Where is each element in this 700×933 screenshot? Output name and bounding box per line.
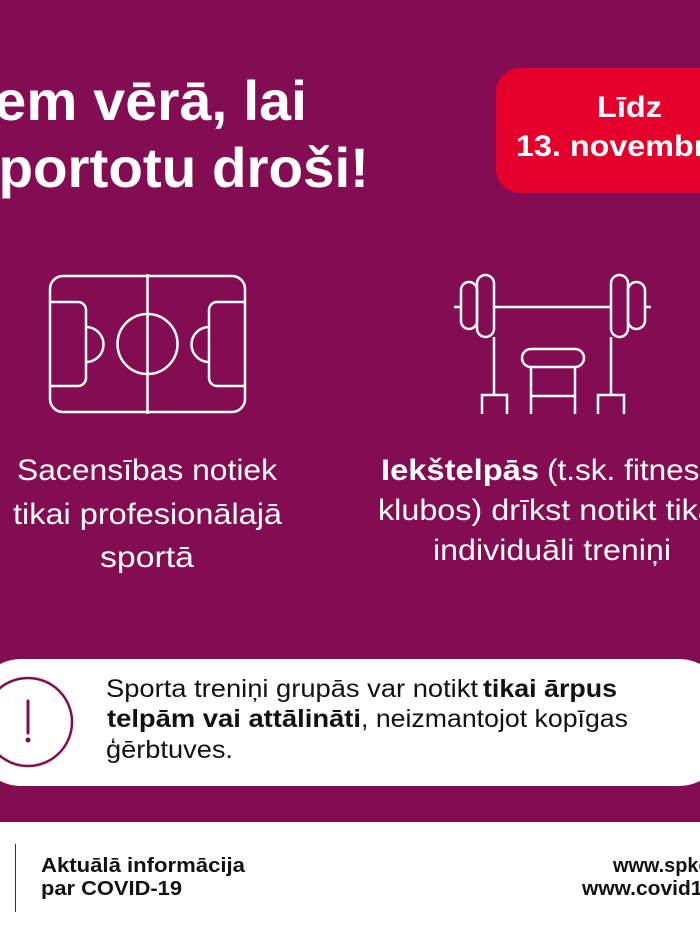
footer label: par COVID-19 (41, 878, 182, 900)
icon: warning circle (0, 678, 72, 766)
callout text: ģērbtuves. (106, 736, 233, 764)
icon: football pitch (50, 274, 245, 414)
callout panel (0, 659, 700, 786)
text block: indoor training: individuāli treniņi (433, 534, 671, 567)
text block: competitions: tikai profesionālajā (13, 498, 283, 531)
text block: competitions: Sacensības notiek (17, 454, 277, 487)
footer label (41, 855, 246, 900)
callout text: telpām vai attālināti (107, 705, 361, 733)
footer links (581, 855, 700, 900)
text block: indoor training: klubos) drīkst notikt tikai (378, 494, 700, 527)
footer (0, 822, 700, 933)
title (0, 69, 369, 199)
text block: competitions: sportā (100, 541, 195, 574)
date badge (496, 68, 700, 193)
footer label: Aktuālā informācija (41, 855, 246, 877)
callout text (106, 675, 628, 764)
icon: barbell and bench (454, 275, 651, 414)
text block: indoor training: Iekštelpās (381, 454, 539, 487)
date badge: Līdz (597, 91, 662, 124)
callout text: , neizmantojot kopīgas (361, 705, 628, 733)
text block: indoor training (378, 454, 700, 567)
text block: competitions (13, 454, 283, 574)
callout text: Sporta treniņi grupās var notikt (106, 675, 478, 703)
callout text: tikai ārpus (483, 675, 617, 703)
